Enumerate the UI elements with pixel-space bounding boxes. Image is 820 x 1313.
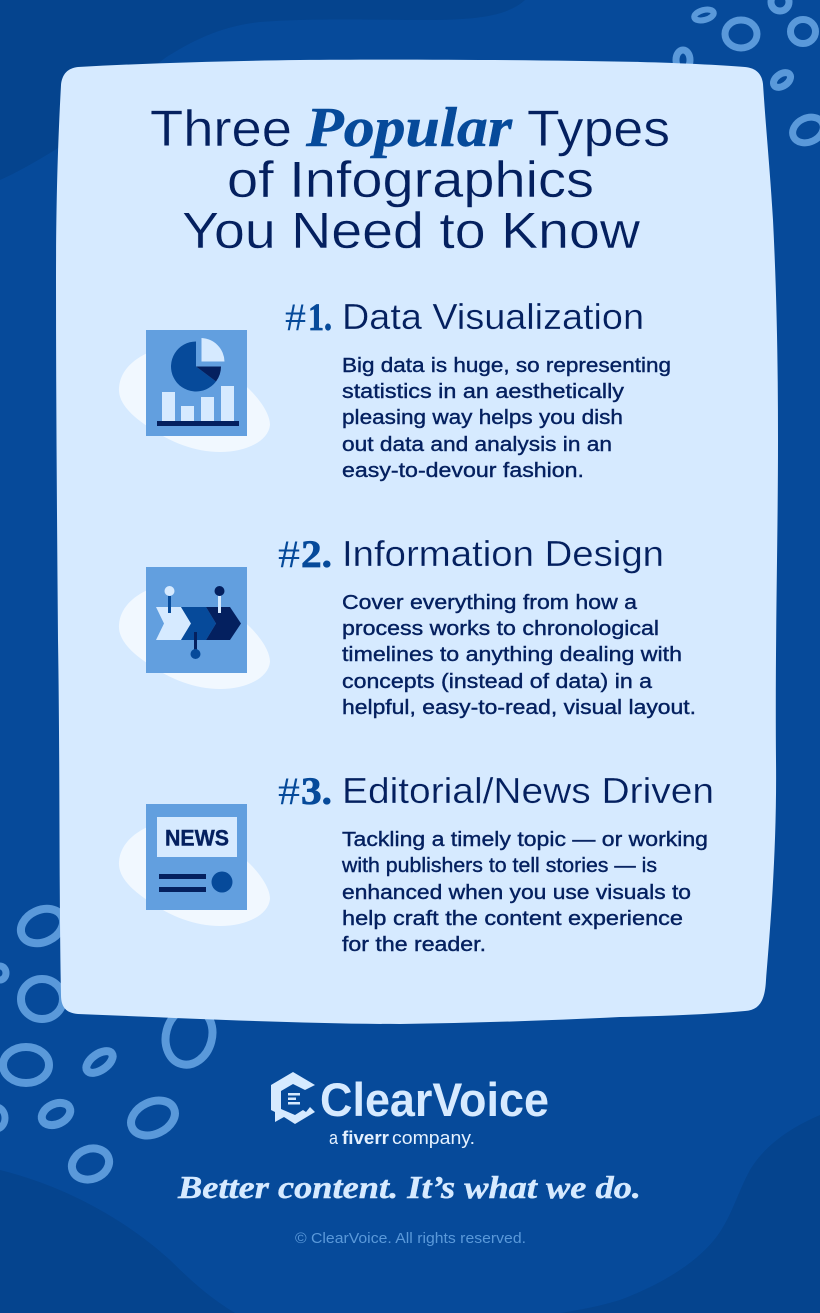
decorative rings, top right [676, 0, 820, 148]
text: data visualization: pleasing way helps you dish [342, 406, 623, 429]
icon: pie chart and bars [119, 330, 270, 452]
text: data visualization: statistics in an aesthetically [342, 380, 625, 403]
text: editorial/news driven [341, 828, 708, 956]
heading: data visualization: # [285, 296, 306, 339]
icon: newspaper: NEWS [165, 826, 229, 850]
title: Types [527, 100, 670, 157]
tagline: Better content. It’s what we do. [177, 1169, 641, 1205]
copyright: © ClearVoice. All rights reserved. [295, 1230, 526, 1247]
title [150, 97, 670, 259]
icon: process arrows [119, 567, 270, 689]
heading: editorial/news driven: 3. [301, 770, 332, 813]
heading: data visualization: 1. [308, 296, 332, 339]
text: a fiverr company [329, 1128, 475, 1148]
section 3: editorial/news driven [119, 770, 714, 956]
heading: information design: Information Design [342, 533, 664, 574]
text: data visualization: Big data is huge, so representing [342, 354, 671, 377]
title: You Need to Know [182, 202, 640, 259]
title: Popular [305, 97, 513, 159]
heading: data visualization: Data Visualization [342, 296, 644, 337]
text: a fiverr company: company. [392, 1128, 475, 1148]
heading: editorial/news driven: Editorial/News Driven [342, 770, 714, 811]
text: information design: helpful, easy-to-read, visual layout. [342, 696, 696, 719]
title: Three [150, 100, 292, 157]
text: information design: concepts (instead of data) in a [342, 670, 653, 693]
text: clearvoice wordmark: ClearVoice [320, 1073, 549, 1126]
text: editorial/news driven: for the reader. [342, 933, 486, 956]
icon: clearvoice hexagon [271, 1072, 315, 1124]
text: data visualization [342, 354, 671, 482]
text: information design: process works to chronological [342, 617, 659, 640]
logo: clearvoice [271, 1072, 549, 1148]
main card [56, 60, 778, 1024]
text: editorial/news driven: with publishers to tell stories — is [341, 854, 657, 877]
heading: information design: 2. [301, 533, 332, 576]
heading: editorial/news driven: # [278, 770, 300, 813]
section 2: information design [119, 533, 696, 719]
text: data visualization: easy-to-devour fashion. [342, 459, 584, 482]
text: information design: timelines to anything dealing with [342, 643, 682, 666]
text: editorial/news driven: help craft the content experience [342, 907, 683, 930]
title: of Infographics [227, 151, 594, 208]
text: editorial/news driven: Tackling a timely topic — or working [342, 828, 708, 851]
text: data visualization: out data and analysis in an [342, 433, 612, 456]
decorative rings, bottom left [0, 902, 219, 1185]
text: information design: Cover everything from how a [342, 591, 638, 614]
section 1: data visualization [119, 296, 671, 482]
text: information design [342, 591, 696, 719]
text: editorial/news driven: enhanced when you use visuals to [342, 881, 691, 904]
heading: information design: # [278, 533, 300, 576]
icon: newspaper [119, 804, 270, 926]
text: a fiverr company: fiverr [342, 1128, 389, 1148]
text: a fiverr company: a [329, 1128, 339, 1148]
